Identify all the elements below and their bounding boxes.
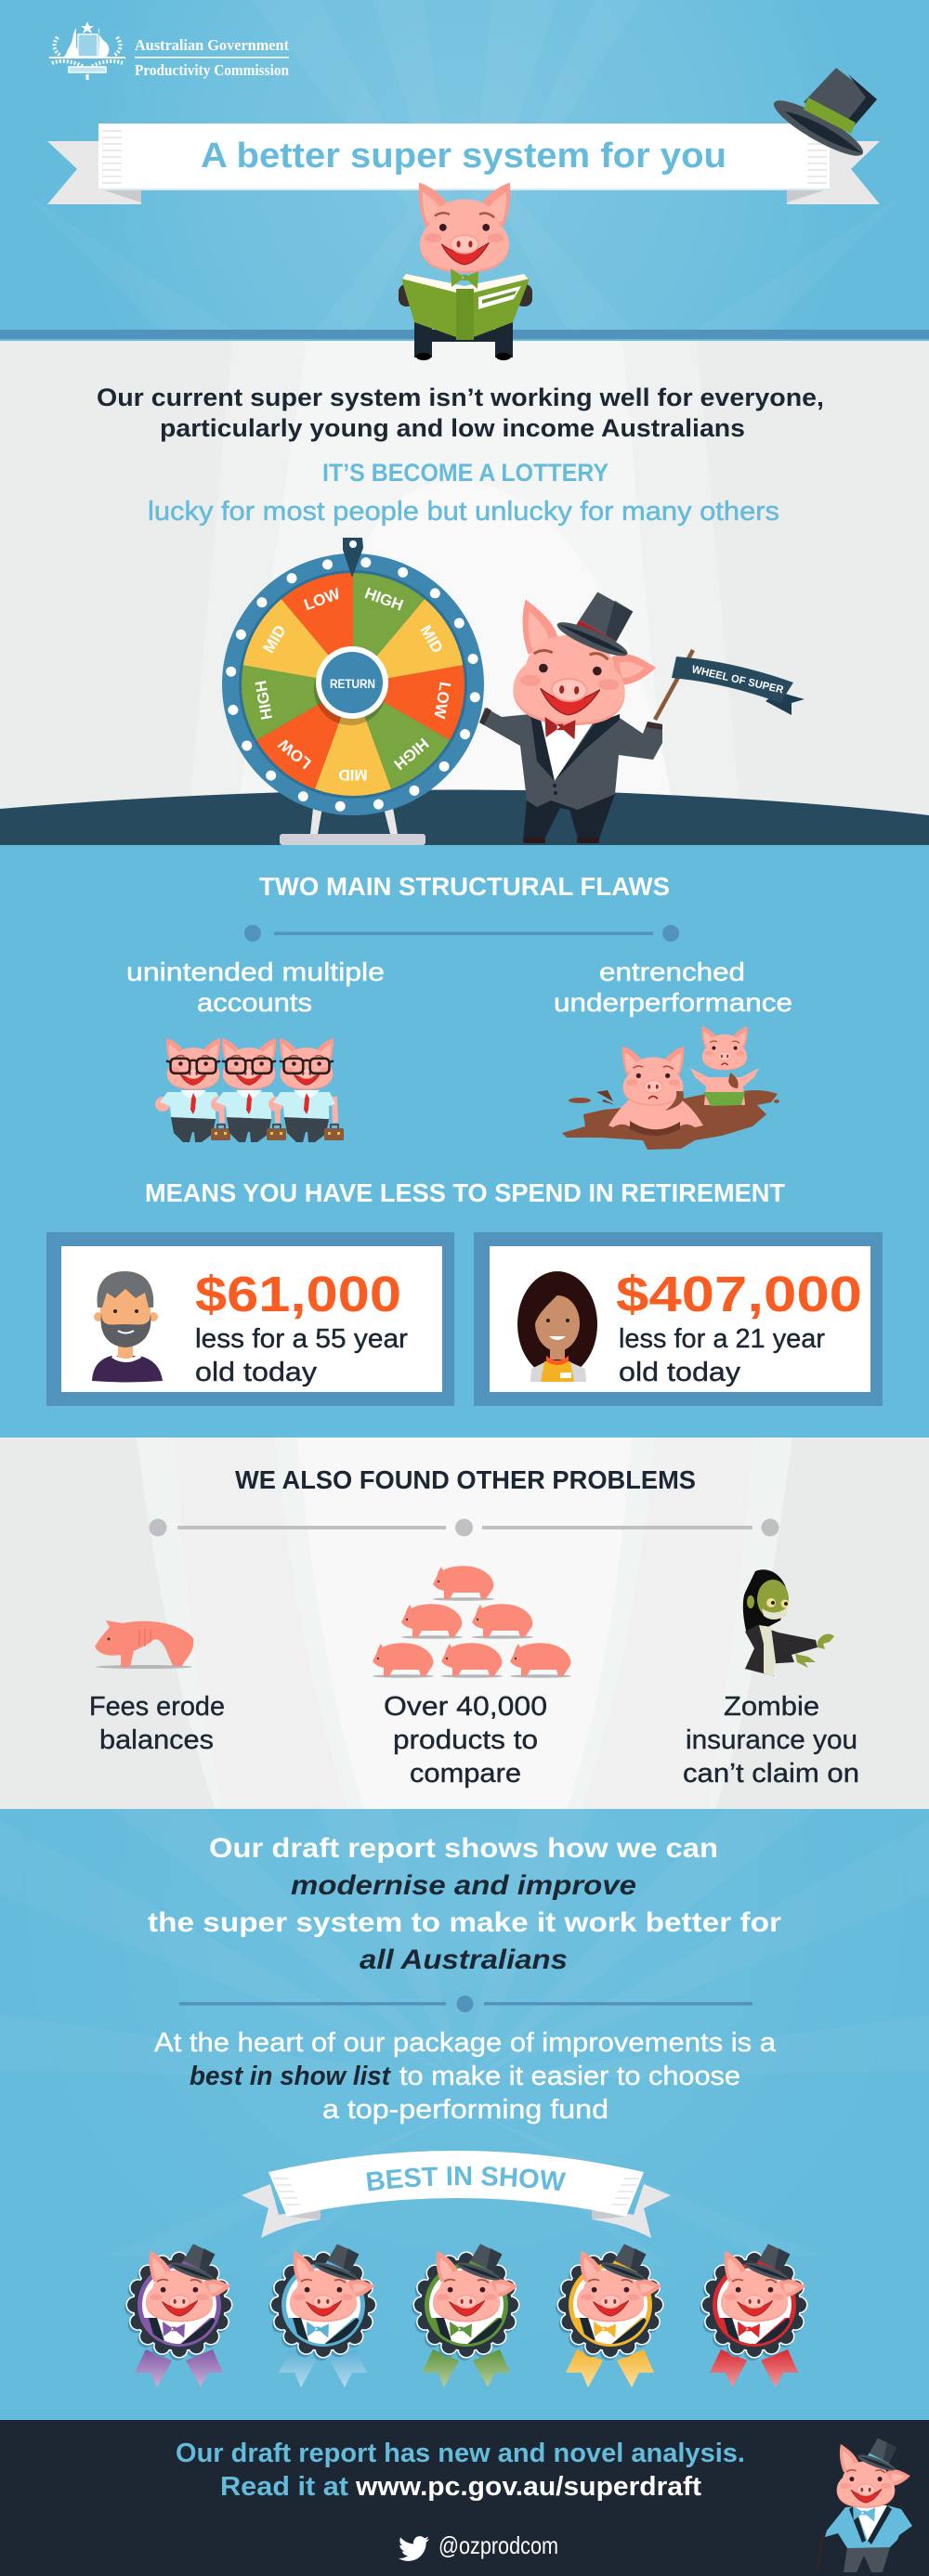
- text: call to action: Our draft report has new and novel analysis.: [176, 2439, 745, 2468]
- text: unintended multiple accounts: accounts: [197, 988, 312, 1017]
- wheel labels: HIGH: [362, 584, 406, 615]
- text: best in show list: a top-performing fund: [322, 2095, 608, 2125]
- best in show ribbon: BEST IN SHOW: [366, 2166, 567, 2192]
- text: department names: [135, 36, 289, 79]
- text: call to action: www.pc.gov.au/superdraft: [355, 2472, 701, 2502]
- wheel rim dots: [226, 557, 480, 812]
- icon: three pigs in office wear: [155, 1038, 344, 1142]
- background rays: [103, 0, 826, 330]
- text: twitter handle: @ozprodcom: [438, 2531, 558, 2559]
- wheel labels: LOW: [274, 735, 315, 773]
- badge: purple: [125, 2244, 231, 2387]
- wheel labels: [252, 584, 454, 784]
- wheel segments: [242, 573, 464, 796]
- pig ringmaster with flag: [479, 588, 805, 843]
- chart: wheel of super: [222, 538, 484, 845]
- panel: draft report: [79, 1809, 829, 2387]
- logo: Australian Government Productivity Commission: [49, 21, 289, 80]
- text: zombie insurance: can’t claim on: [683, 1759, 859, 1789]
- icon: top hat on ribbon: [768, 68, 877, 164]
- divider: [244, 925, 679, 942]
- panel: lottery intro: [0, 341, 929, 845]
- text: department names: Productivity Commission: [135, 61, 289, 79]
- panel: two main structural flaws: [46, 872, 883, 1406]
- best in show ribbon: [242, 2151, 671, 2238]
- text: report summary: Our draft report shows how we can: [209, 1833, 718, 1864]
- text: best in show list: best in show list: [190, 2062, 391, 2091]
- card: 21 year old: [474, 1232, 883, 1406]
- text: zombie insurance: Zombie: [724, 1692, 819, 1722]
- stat: $61,000: $61,000: [195, 1267, 401, 1322]
- text: entrenched underperformance: [554, 957, 792, 1017]
- text: fees erode balances: balances: [99, 1725, 214, 1755]
- panel: header: [0, 0, 929, 341]
- badge: blue: [269, 2244, 375, 2387]
- icon: pigs in mud: [562, 1026, 779, 1150]
- small pig: [690, 1026, 759, 1106]
- big pig: [608, 1046, 703, 1136]
- text: fees erode balances: Fees erode: [89, 1692, 225, 1722]
- text: fees erode balances: [89, 1692, 225, 1755]
- text: intro: particularly young and low income Australians: [160, 414, 745, 442]
- text: report summary: modernise and improve: [291, 1870, 636, 1901]
- stat: $407,000: $407,000: [616, 1267, 862, 1322]
- badge: red: [700, 2244, 806, 2387]
- wheel labels: HIGH: [252, 679, 276, 722]
- heading: lottery: IT’S BECOME A LOTTERY: [322, 459, 608, 487]
- text: department names: Australian Government: [135, 36, 289, 54]
- text: less for a 21 year: [619, 1324, 825, 1354]
- icon: twitter bird: [399, 2536, 429, 2561]
- badge: yellow: [556, 2244, 662, 2387]
- heading: WE ALSO FOUND OTHER PROBLEMS: [235, 1465, 696, 1494]
- text: best in show list: [154, 2028, 777, 2125]
- icon: coat of arms: [49, 21, 125, 80]
- text: intro: [97, 384, 824, 442]
- text: intro: Our current super system isn’t working well for everyone,: [97, 384, 824, 411]
- background rays: [79, 1809, 829, 2251]
- divider: [179, 1996, 752, 2012]
- icon: thin piggy bank: [95, 1620, 193, 1669]
- wheel hub: RETURN: [330, 677, 375, 691]
- text: over 40,000 products: products to: [393, 1725, 538, 1755]
- text: zombie insurance: [683, 1692, 859, 1789]
- text: old today: [619, 1358, 741, 1387]
- panel: other problems: [0, 1438, 929, 1809]
- wheel hub: [314, 646, 388, 725]
- subheading: lucky for most people but unlucky for many others: [148, 497, 779, 527]
- text: report summary: all Australians: [360, 1945, 568, 1975]
- text: best in show list: At the heart of our package of improvements is a: [154, 2028, 777, 2058]
- icon: bearded man: [92, 1271, 163, 1382]
- text: over 40,000 products: Over 40,000: [384, 1692, 547, 1722]
- icon: book: [401, 268, 530, 340]
- text: unintended multiple accounts: unintended multiple: [126, 957, 385, 986]
- flag: WHEEL OF SUPER: [690, 664, 785, 696]
- ground: [0, 790, 929, 845]
- text: entrenched underperformance: entrenched: [599, 957, 745, 986]
- text: less for a 55 year: [195, 1324, 408, 1354]
- icon: zombie: [743, 1569, 834, 1676]
- panel: reading pig: [399, 182, 532, 360]
- card: 55 year old: [46, 1232, 454, 1406]
- text: report summary: the super system to make it work better for: [148, 1907, 781, 1938]
- title: A better super system for you: [201, 137, 726, 176]
- text: call to action: Read it at: [220, 2472, 348, 2502]
- wheel labels: MID: [260, 622, 290, 656]
- text: old today: [195, 1358, 318, 1387]
- title ribbon: [47, 124, 880, 204]
- text: report summary: [148, 1833, 781, 1975]
- text: unintended multiple accounts: [126, 957, 385, 1017]
- blue stripe: [0, 330, 929, 339]
- icon: young woman: [517, 1271, 597, 1382]
- text: [619, 1324, 825, 1387]
- text: over 40,000 products: [384, 1692, 547, 1789]
- badge: green: [412, 2244, 518, 2387]
- heading: less to spend: MEANS YOU HAVE LESS TO SPEND IN RETIREMENT: [145, 1178, 785, 1207]
- divider: [149, 1519, 779, 1536]
- suit: [523, 794, 615, 840]
- heading: TWO MAIN STRUCTURAL FLAWS: [259, 872, 670, 901]
- wheel pointer: [343, 538, 363, 578]
- text: [195, 1324, 408, 1387]
- text: zombie insurance: insurance you: [686, 1725, 857, 1755]
- text: entrenched underperformance: underperformance: [554, 988, 792, 1017]
- text: over 40,000 products: compare: [410, 1759, 521, 1789]
- panel: footer: [0, 2420, 929, 2576]
- footer pig with cane: [818, 2438, 912, 2572]
- wheel labels: MID: [338, 766, 368, 784]
- text: call to action: [176, 2439, 745, 2502]
- wheel labels: MID: [416, 622, 446, 656]
- text: best in show list: to make it easier to choose: [399, 2062, 740, 2091]
- wheel labels: HIGH: [390, 735, 432, 774]
- wheel labels: LOW: [302, 584, 343, 614]
- wheel labels: LOW: [430, 681, 454, 721]
- icon: pile of piggy banks: [373, 1566, 571, 1678]
- flag: [655, 650, 805, 720]
